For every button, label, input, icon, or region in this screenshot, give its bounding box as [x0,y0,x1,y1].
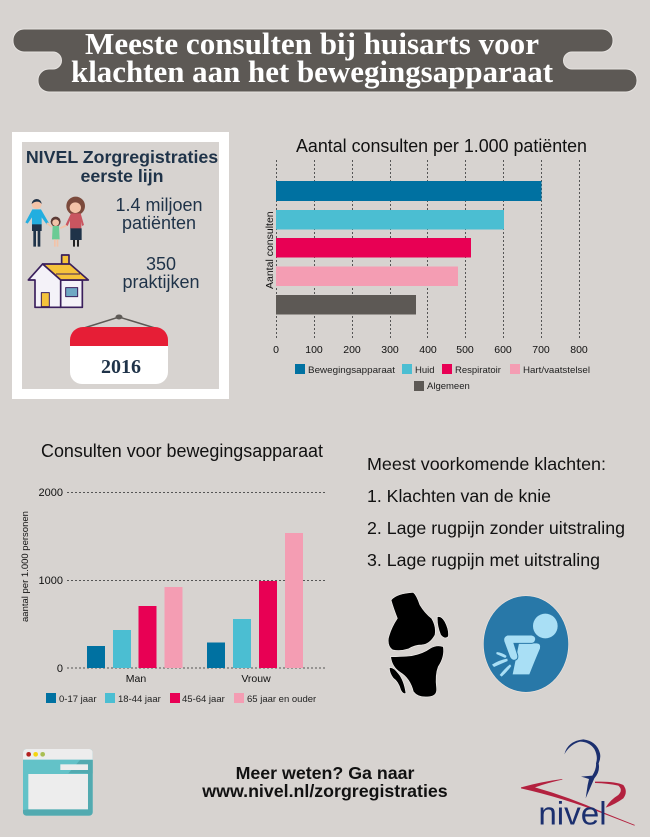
bar: Algemeen [276,295,416,314]
bars: Man [87,587,182,668]
icon: family [25,197,85,247]
chart title: Aantal consulten per 1.000 patiënten [296,136,587,156]
bar chart: consulten per 1.000 patiënten [264,136,590,392]
x axis labels: 700 [532,344,550,356]
call to action: Meer weten? Ga naar [236,763,415,783]
title text [71,26,554,89]
complaints list [367,454,625,570]
x axis labels: 600 [494,344,512,356]
logo: nivel: nivel [538,795,607,831]
panel heading: NIVEL Zorgregistraties [26,147,218,167]
chart legend: 65 jaar en ouder [247,694,316,705]
patient count: patiënten [122,213,196,233]
bar: Hart/vaatstelsel [276,266,458,286]
chart legend: Hart/vaatstelsel [523,365,590,376]
chart legend: Bewegingsapparaat [308,365,395,376]
x axis labels: 0 [273,344,279,356]
bar: Huid [276,210,504,230]
panel: NIVEL Zorgregistraties [17,137,224,394]
complaints list: Meest voorkomende klachten: [367,454,606,474]
category labels [126,673,271,685]
icon: browser window [23,749,93,816]
complaints list: 1. Klachten van de knie [367,486,551,506]
y axis tick labels: 2000 [39,487,63,499]
category labels: Vrouw [241,673,271,685]
y axis label: aantal per 1.000 personen [20,511,31,622]
practices count: 350 [146,254,176,274]
x axis labels: 400 [419,344,437,356]
logo: nivel [521,739,635,831]
x axis labels: 800 [570,344,588,356]
chart title: Consulten voor bewegingsapparaat [41,441,323,461]
chart legend: 0-17 jaar [59,694,96,705]
bar: Respiratoir [276,238,471,258]
complaints list: 3. Lage rugpijn met uitstraling [367,550,600,570]
chart legend: 45-64 jaar [182,694,225,705]
x axis labels [273,344,588,356]
title text: Meeste consulten bij huisarts voor [85,26,539,61]
icon: calendar 2016: 2016 [101,356,141,378]
y axis tick labels [39,487,63,675]
x axis labels: 100 [305,344,323,356]
call to action: www.nivel.nl/zorgregistraties [201,781,448,801]
icon: house [28,255,88,307]
chart legend [295,364,590,392]
x axis labels: 200 [343,344,361,356]
patient count: 1.4 miljoen [115,195,203,215]
chart legend: 18-44 jaar [118,694,161,705]
panel heading: eerste lijn [80,166,164,186]
x axis labels: 300 [381,344,399,356]
bar chart: consulten voor bewegingsapparaat [20,441,325,705]
bar: Bewegingsapparaat [276,181,542,201]
complaints list: 2. Lage rugpijn zonder uitstraling [367,518,625,538]
y axis tick labels: 0 [57,663,63,675]
practices count: praktijken [122,272,200,292]
chart legend [46,693,316,705]
x axis labels: 500 [456,344,474,356]
category labels: Man [126,673,146,685]
banner shape [13,29,637,92]
y axis tick labels: 1000 [39,575,63,587]
title banner [13,26,637,92]
chart legend: Huid [415,365,435,376]
icon: calendar 2016 [70,314,168,384]
chart legend: Respiratoir [455,365,501,376]
bars: Vrouw [207,533,303,668]
y axis label: Aantal consulten [264,211,276,289]
chart legend: Algemeen [427,381,470,392]
title text: klachten aan het bewegingsapparaat [71,54,554,89]
icon: knee joint [388,592,449,697]
icon: back pain [483,596,569,692]
panel frame [17,137,224,394]
